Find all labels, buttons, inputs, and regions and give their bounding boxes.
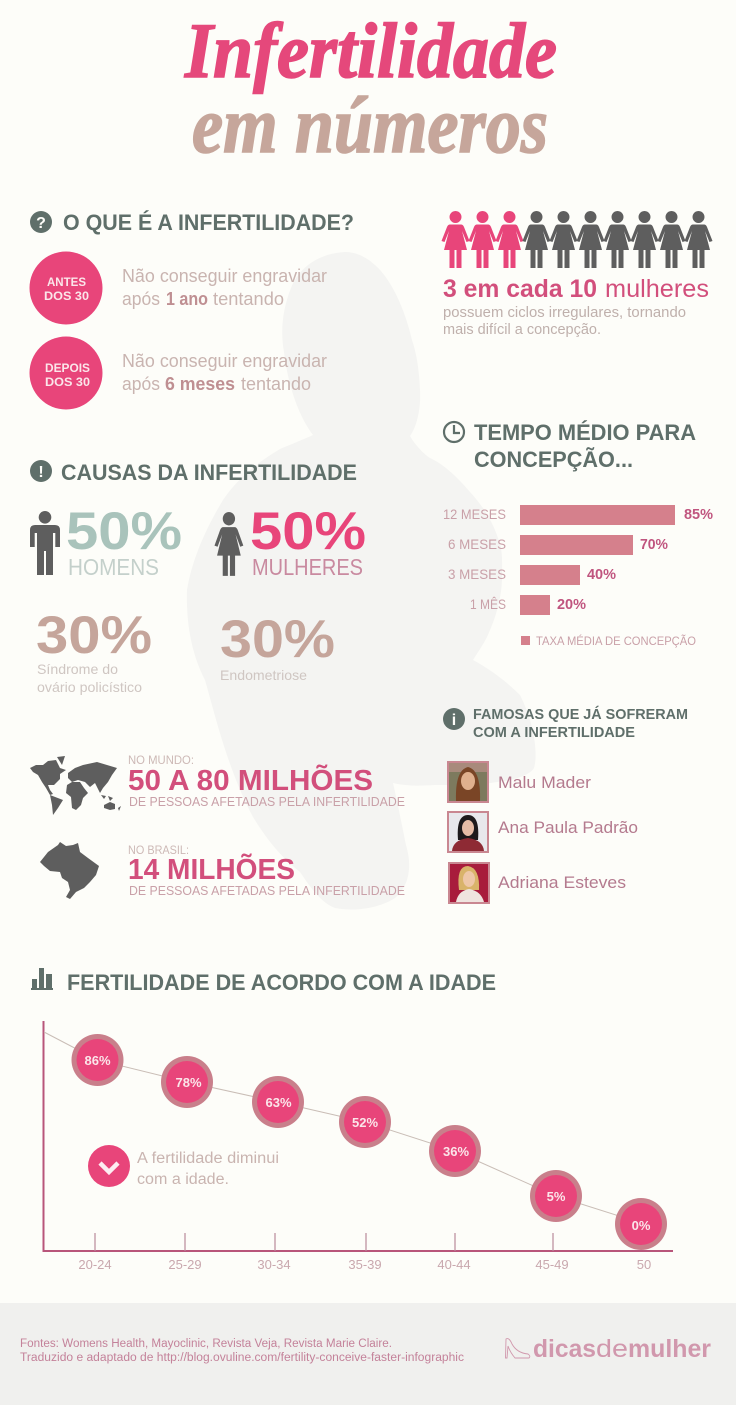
text: depois dos 30: tentando [241, 374, 311, 394]
stat: 3 em cada 10 mulheres: mais difícil a concepção. [443, 322, 601, 338]
text: depois dos 30: Não conseguir engravidar [122, 351, 327, 371]
badge: antes dos 30: ANTES [47, 277, 86, 289]
icon: info [443, 708, 465, 730]
bar chart: concepção: 6 MESES [448, 536, 506, 552]
title: em números [192, 82, 548, 170]
stat: 30% endometriose: 30% [220, 610, 335, 669]
bar chart: concepção: 12 MESES [443, 506, 506, 522]
bar chart: concepção: 40% [587, 567, 616, 583]
stat: 30% síndrome: 30% [36, 606, 152, 665]
text: antes dos 30: tentando [213, 289, 284, 309]
callout: fertility declines: A fertilidade diminui [137, 1150, 279, 1167]
title [184, 7, 557, 170]
line chart: fertility by age: 5% [547, 1189, 566, 1204]
legend: TAXA MÉDIA DE CONCEPÇÃO [536, 633, 696, 648]
badge: antes dos 30 [30, 252, 102, 324]
logo: dicas de mulher [506, 1335, 711, 1363]
line chart: fertility by age: 0% [632, 1218, 651, 1233]
stat: 50% mulheres: 50% [250, 502, 366, 561]
bar chart: concepção: 3 MESES [448, 566, 506, 582]
logo: dicas de mulher: de [596, 1335, 628, 1363]
heading: tempo médio [474, 420, 696, 472]
stat: 50% homens: HOMENS [68, 554, 159, 580]
stat: 3 em cada 10 mulheres [443, 275, 709, 338]
stat: 50% mulheres [250, 502, 366, 580]
text: antes dos 30: após [122, 289, 160, 309]
stat: no brasil: NO BRASIL: [128, 845, 189, 857]
sources: Traduzido e adaptado de http://blog.ovuline.com/fertility-conceive-faster-infographic [20, 1352, 464, 1364]
photo: Adriana Esteves [448, 862, 490, 904]
icon: question: ? [36, 215, 46, 232]
bar chart: concepção: 70% [640, 537, 668, 553]
icon: bar chart [31, 968, 53, 990]
icon: exclamation: ! [38, 464, 44, 481]
photo: Ana Paula Padrão [447, 811, 489, 853]
icon: brazil map [40, 842, 99, 899]
line chart: fertility by age: 30-34 [257, 1257, 291, 1272]
heading: famosas: FAMOSAS QUE JÁ SOFRERAM [473, 706, 688, 723]
line chart: fertility by age: 78% [175, 1075, 202, 1090]
text: antes dos 30: 1 ano [166, 289, 208, 309]
line chart: fertility by age: 40-44 [437, 1257, 471, 1272]
icon: question [30, 211, 52, 233]
icon: exclamation [30, 460, 52, 482]
stat: 3 em cada 10 mulheres: mulheres [605, 275, 709, 303]
line chart: fertility by age: 20-24 [78, 1257, 112, 1272]
callout: fertility declines [88, 1145, 279, 1188]
line chart: fertility by age: 50 [637, 1257, 651, 1272]
heading: o que é: O QUE É A INFERTILIDADE? [63, 210, 354, 235]
bar chart: concepção: 85% [684, 507, 713, 523]
line chart: fertility by age [44, 1021, 673, 1272]
badge: depois dos 30: DOS 30 [45, 377, 90, 389]
text: depois dos 30: 6 meses [165, 374, 235, 394]
heading: tempo médio: TEMPO MÉDIO PARA [474, 420, 696, 445]
badge: antes dos 30: DOS 30 [44, 291, 89, 303]
heading: famosas: COM A INFERTILIDADE [473, 724, 635, 741]
text: antes dos 30 [122, 266, 327, 309]
stat: no mundo: 50 A 80 MILHÕES [128, 763, 373, 797]
section: tempo médio para concepção [443, 420, 713, 648]
stat: 30% síndrome: ovário policístico [37, 679, 142, 695]
icon: clock [444, 422, 464, 442]
icon: world map [30, 756, 121, 815]
icon: man [30, 511, 60, 575]
heading: tempo médio: CONCEPÇÃO... [474, 447, 633, 472]
text: depois dos 30: após [122, 374, 160, 394]
icon: woman [214, 512, 243, 576]
stat: no brasil [128, 845, 405, 898]
heading: causas: CAUSAS DA INFERTILIDADE [61, 460, 357, 485]
line chart: fertility by age: 35-39 [348, 1257, 382, 1272]
heading: fertilidade: FERTILIDADE DE ACORDO COM A IDADE [67, 970, 496, 995]
section: fertilidade por idade [31, 968, 673, 1272]
logo: dicas de mulher: dicas [533, 1335, 596, 1363]
callout: fertility declines: com a idade. [137, 1171, 229, 1188]
icon: info: i [452, 712, 456, 729]
line chart: fertility by age: 86% [84, 1053, 111, 1068]
line chart: fertility by age: 36% [443, 1144, 469, 1159]
sources: Fontes: Womens Health, Mayoclinic, Revista Veja, Revista Marie Claire. [20, 1338, 392, 1350]
section: o que é a infertilidade [30, 210, 354, 410]
stat: no mundo: DE PESSOAS AFETADAS PELA INFERTILIDADE [129, 794, 405, 809]
name: Ana Paula Padrão: Ana Paula Padrão [498, 818, 638, 837]
bar chart: concepção [443, 505, 713, 615]
line chart: fertility by age: 25-29 [168, 1257, 202, 1272]
bar chart: concepção: 1 MÊS [470, 596, 506, 612]
section: famosas [443, 706, 688, 904]
section: causas da infertilidade [30, 460, 366, 695]
stat: 30% endometriose: Endometriose [220, 667, 307, 683]
badge: depois dos 30 [30, 336, 102, 410]
title: Infertilidade [184, 7, 557, 94]
stat: 30% síndrome [36, 606, 152, 695]
stat: no mundo: NO MUNDO: [128, 755, 194, 767]
stat: 50% homens: 50% [66, 502, 182, 561]
photo: Malu Mader [447, 761, 489, 803]
line chart: fertility by age: 45-49 [535, 1257, 569, 1272]
stat: no mundo [128, 755, 405, 809]
logo: dicas de mulher: mulher [628, 1335, 711, 1363]
stat: 3 em cada 10 mulheres: possuem ciclos irregulares, tornando [443, 305, 686, 321]
line chart: fertility by age: 52% [352, 1115, 378, 1130]
heading: famosas [473, 706, 688, 741]
stat: no brasil: 14 MILHÕES [128, 852, 295, 886]
pictogram: 3 in 10 women [442, 211, 712, 268]
stat: 50% homens [66, 502, 182, 580]
text: depois dos 30 [122, 351, 327, 394]
stat: 30% síndrome: Síndrome do [37, 661, 118, 677]
stat: no brasil: DE PESSOAS AFETADAS PELA INFERTILIDADE [129, 883, 405, 898]
footer [0, 1303, 736, 1405]
badge: depois dos 30: DEPOIS [45, 363, 90, 375]
sources [20, 1338, 464, 1364]
name: Malu Mader: Malu Mader [498, 773, 591, 792]
stat: 50% mulheres: MULHERES [252, 554, 363, 580]
stat: 3 em cada 10 mulheres: 3 em cada 10 [443, 275, 597, 303]
line chart: fertility by age: 63% [265, 1095, 292, 1110]
baby silhouette background [187, 252, 536, 910]
bar chart: concepção: 20% [557, 597, 586, 613]
name: Adriana Esteves: Adriana Esteves [498, 873, 626, 892]
text: antes dos 30: Não conseguir engravidar [122, 266, 327, 286]
